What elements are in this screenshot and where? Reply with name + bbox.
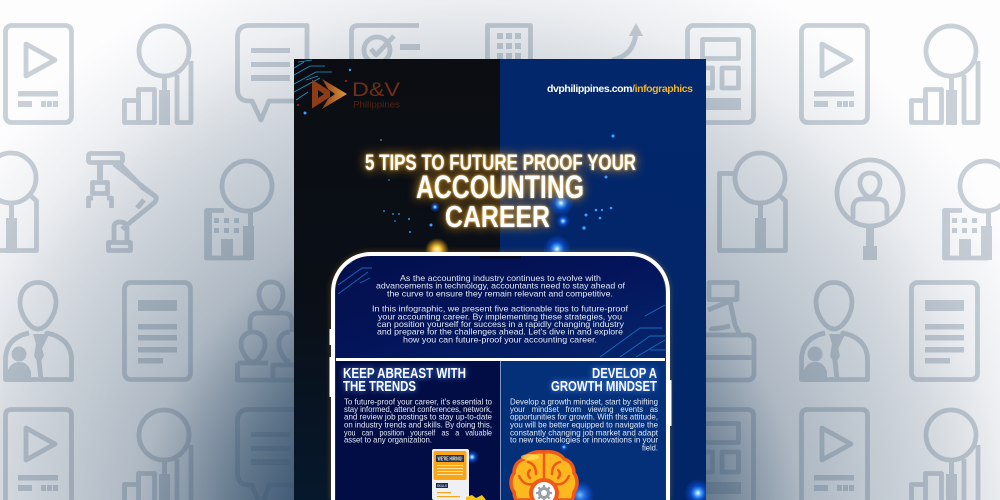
tip 1 body: you can position yourself as a valuable <box>344 427 492 437</box>
intro paragraph 2: your accounting career. By implementing these strategies, you <box>378 311 622 321</box>
tip 2 body <box>510 396 659 452</box>
icon: magnifier chart row 1 <box>124 26 191 125</box>
small blue light <box>560 444 568 450</box>
icon: play document row 4 right <box>802 410 868 500</box>
icon: check document <box>352 26 420 63</box>
tip 1 body: on industry trends and skills. By doing this, <box>344 419 492 429</box>
intro paragraph 2 <box>372 304 629 344</box>
phone frame <box>333 254 668 500</box>
horizontal divider <box>336 358 665 361</box>
icon: business person row 3 right <box>802 282 868 382</box>
intro paragraph 2: how you can future-proof your accounting career. <box>403 334 597 344</box>
brain outline <box>511 452 577 500</box>
logo wordmark: D&V <box>352 80 400 101</box>
phone notch <box>480 256 521 258</box>
tip 2 body: you will be better equipped to navigate the <box>510 419 658 429</box>
tip 2 body: to new technologies or innovations in your <box>510 435 658 445</box>
poster orange lines <box>437 492 460 497</box>
circuit decoration top left <box>294 60 332 100</box>
tip 1 body: and review job postings to stay up-to-date <box>344 412 492 422</box>
icon: layout document row 1 <box>688 26 754 122</box>
tip 1 heading: THE TRENDS <box>343 378 416 395</box>
intro paragraph 1: the curve to ensure they remain relevant and competitive. <box>387 289 613 299</box>
glow: gold light on phone edge <box>425 238 449 262</box>
poster orange block <box>434 451 466 480</box>
phone side buttons <box>330 329 672 426</box>
tip 2 body: field. <box>642 442 658 452</box>
intro paragraph 1 <box>376 275 625 298</box>
icon: magnifier chart row 1 right <box>912 26 978 125</box>
icon: magnifier document right <box>720 153 786 253</box>
title <box>365 150 636 234</box>
tip 1: keep abreast <box>343 365 492 500</box>
tip 2 body: your mindset from viewing events as <box>510 404 658 414</box>
icon: speech bubble row 1 <box>238 26 307 120</box>
hand <box>466 495 486 500</box>
phone glow <box>333 254 668 500</box>
red and blue sparks top left <box>297 69 351 114</box>
tip 2 heading: GROWTH MINDSET <box>551 378 657 395</box>
right column background <box>500 358 665 500</box>
logo subtitle: Philippines <box>353 100 401 110</box>
icon: building magnifier right <box>944 161 1000 260</box>
intro panel background <box>336 256 665 358</box>
icon: office building top <box>488 26 530 62</box>
left column background <box>336 358 500 500</box>
icon: text document row 3 <box>124 282 190 380</box>
glow behind poster <box>469 450 478 464</box>
star field <box>380 134 615 233</box>
title line 2: ACCOUNTING <box>416 169 584 205</box>
icon: business person row 3 <box>6 282 72 382</box>
circuit decoration intro bottom right <box>600 305 665 357</box>
brain illustration <box>511 452 577 500</box>
icon: play document row 1 right <box>802 26 868 122</box>
panel: blue right half <box>500 59 706 500</box>
tip 2: growth mindset <box>510 365 659 500</box>
tip 1 body: asset to any organization. <box>344 435 432 445</box>
icon: stack with hand <box>700 282 754 380</box>
logo <box>312 79 401 110</box>
panel: dark left half <box>294 59 500 500</box>
tip 1 heading <box>343 365 466 395</box>
circuit decoration intro top left <box>338 262 372 294</box>
tip 2 heading <box>551 365 657 395</box>
glow behind brain <box>574 482 593 500</box>
tip 1 body <box>344 396 492 445</box>
icon: group of people <box>238 282 305 380</box>
icon: magnifier chart row 4 <box>124 410 191 500</box>
icon: speech bubble row 4 <box>238 410 307 500</box>
intro paragraph 2: can position yourself for success in a rapidly changing industry <box>377 319 625 329</box>
glow: small blue lights <box>430 190 574 263</box>
icon: building magnifier left <box>206 161 272 260</box>
icon: magnifier chart row 4 right <box>912 410 978 500</box>
tip 2 body: opportunities for growth. With this attitude, <box>510 412 658 422</box>
icon: person magnifier <box>837 160 903 260</box>
icon: magnifier document left <box>0 153 36 253</box>
phone <box>330 254 672 500</box>
tip 1 body: stay informed, attend conferences, network, <box>344 404 492 414</box>
tip 1 heading: KEEP ABREAST WITH <box>343 365 466 382</box>
icon: play document row 4 <box>6 410 72 500</box>
title line 1: 5 TIPS TO FUTURE PROOF YOUR <box>365 150 636 175</box>
phone screen <box>336 256 665 500</box>
title line 3: CAREER <box>445 199 550 234</box>
icon: robot arm <box>88 154 156 250</box>
website url: dvphilippines.com/infographics <box>547 83 693 95</box>
hiring poster illustration <box>432 449 486 500</box>
tip 1 body: To future-proof your career, it's essential to <box>344 396 492 406</box>
poster banner: WE'RE HIRING! <box>438 456 463 462</box>
icon: play document row 1 <box>6 26 72 122</box>
brain highlight <box>521 454 539 460</box>
icon: layout document row 4 <box>688 410 754 500</box>
tip 2 body: constantly changing job market and adapt <box>510 427 659 437</box>
intro paragraph 2: and prepare for the challenges ahead. Let's dive in and explore <box>377 327 623 337</box>
intro paragraph 2: In this infographic, we present five actionable tips to future-proof <box>372 304 629 314</box>
infographic panel <box>294 59 706 500</box>
logo mark <box>312 79 347 109</box>
tip 2 heading: DEVELOP A <box>592 365 657 382</box>
intro paragraph 1: advancements in technology, accountants need to stay ahead of <box>376 281 626 291</box>
poster sheet <box>432 449 469 500</box>
brain folds <box>519 453 569 484</box>
tip 2 body: Develop a growth mindset, start by shifting <box>510 396 658 406</box>
poster skills tag: SKILLS <box>437 484 448 488</box>
intro paragraph 1: As the accounting industry continues to evolve with <box>400 273 601 283</box>
icon: text document row 3 right <box>912 282 978 380</box>
gear <box>536 485 552 500</box>
poster text lines <box>437 465 463 475</box>
icon: growth arrow <box>612 23 643 60</box>
glow: lower right light <box>684 479 706 500</box>
column divider <box>500 361 501 500</box>
gear circle <box>529 478 559 500</box>
